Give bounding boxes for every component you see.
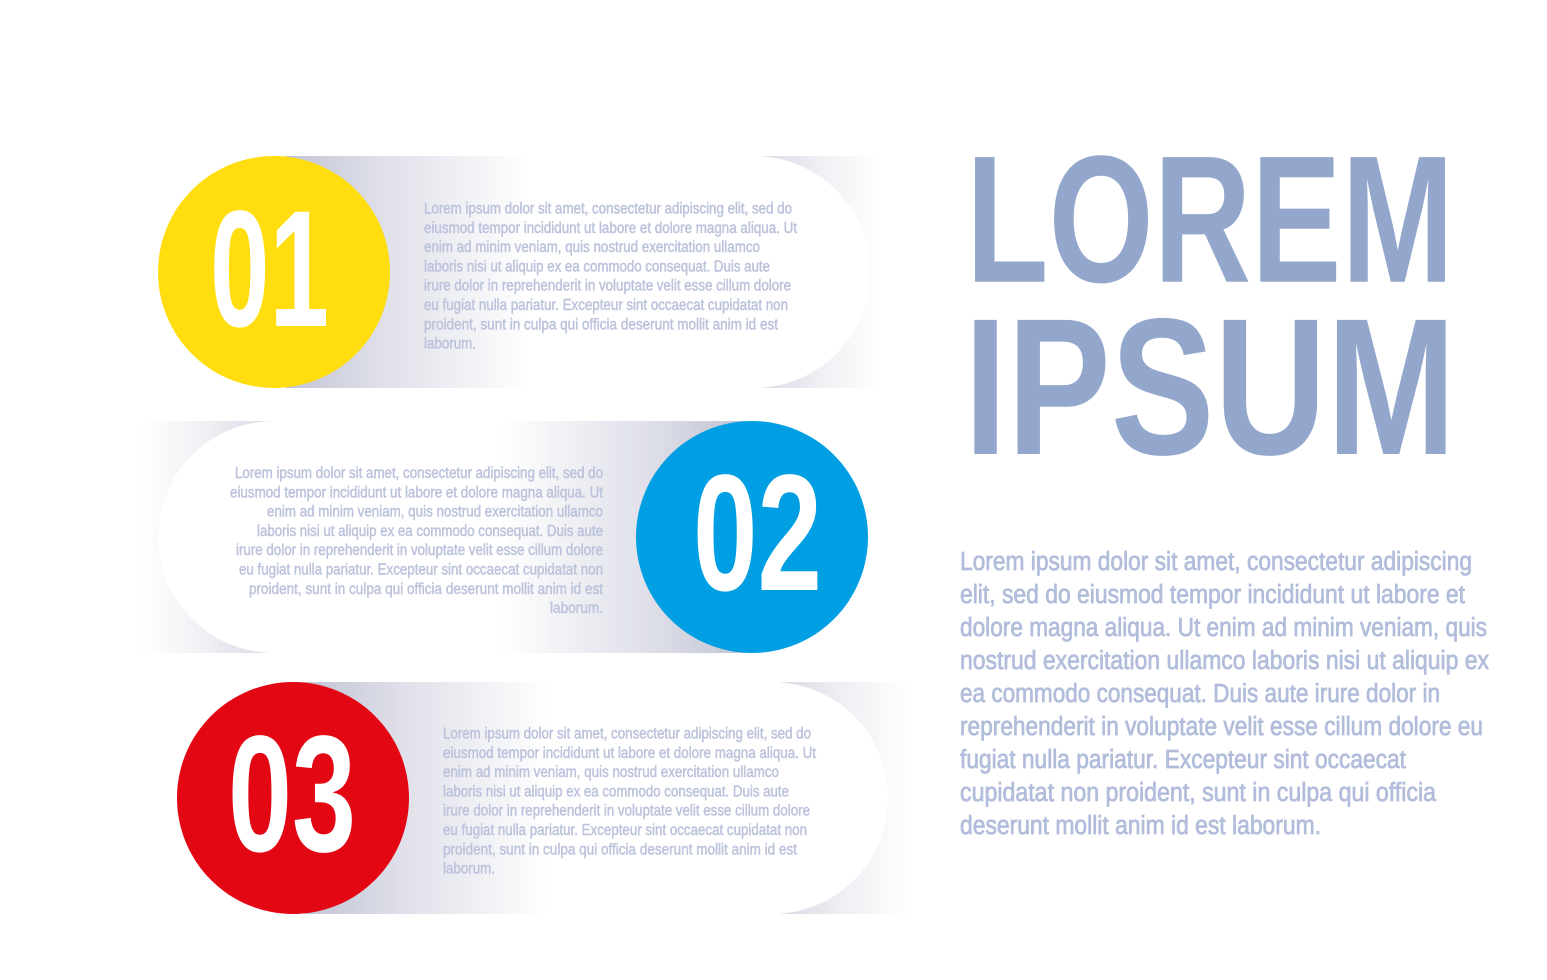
text block: step 02: proident, sunt in culpa qui officia deserunt mollit anim id est bbox=[249, 581, 604, 598]
number 03: 03 bbox=[228, 702, 356, 887]
text block: step 01: eu fugiat nulla pariatur. Excepteur sint occaecat cupidatat non bbox=[424, 297, 788, 314]
text block: step 01: laborum. bbox=[424, 336, 476, 353]
text block: main description: Lorem ipsum dolor sit amet, consectetur adipiscing bbox=[960, 548, 1472, 576]
text block: step 03: proident, sunt in culpa qui officia deserunt mollit anim id est bbox=[443, 841, 798, 858]
text block: step 02: laboris nisi ut aliquip ex ea commodo consequat. Duis aute bbox=[257, 523, 603, 540]
text block: step 01: enim ad minim veniam, quis nostrud exercitation ullamco bbox=[424, 239, 760, 256]
panel: step 03 bbox=[177, 682, 911, 914]
icon: red circle 03 bbox=[177, 682, 409, 914]
panel: step 01 bbox=[158, 156, 882, 388]
text block: main description: cupidatat non proident, sunt in culpa qui officia bbox=[960, 779, 1437, 807]
text block: main description: fugiat nulla pariatur. Excepteur sint occaecat bbox=[960, 746, 1406, 774]
title bbox=[964, 119, 1456, 496]
band shadow: step 02 bbox=[140, 421, 745, 653]
text block: step 02: irure dolor in reprehenderit in voluptate velit esse cillum dolore bbox=[236, 542, 603, 559]
text block: step 02: eu fugiat nulla pariatur. Excepteur sint occaecat cupidatat non bbox=[239, 562, 603, 578]
text block: step 03: laboris nisi ut aliquip ex ea commodo consequat. Duis aute bbox=[443, 783, 789, 800]
text block: step 01: eiusmod tempor incididunt ut labore et dolore magna aliqua. Ut bbox=[424, 220, 798, 237]
text block: step 01: proident, sunt in culpa qui officia deserunt mollit anim id est bbox=[424, 316, 779, 333]
text block: step 02: Lorem ipsum dolor sit amet, consectetur adipiscing elit, sed do bbox=[235, 465, 603, 482]
text block: main description: dolore magna aliqua. Ut enim ad minim veniam, quis bbox=[960, 614, 1487, 642]
text block: step 03: eiusmod tempor incididunt ut labore et dolore magna aliqua. Ut bbox=[443, 745, 817, 762]
text block: step 03: irure dolor in reprehenderit in voluptate velit esse cillum dolore bbox=[443, 803, 810, 820]
text block: step 03: enim ad minim veniam, quis nostrud exercitation ullamco bbox=[443, 764, 779, 781]
text block: step 01: Lorem ipsum dolor sit amet, consectetur adipiscing elit, sed do bbox=[424, 200, 792, 218]
text block: main description: elit, sed do eiusmod tempor incididunt ut labore et bbox=[960, 581, 1465, 609]
number 01: 01 bbox=[210, 177, 329, 362]
text block: step 03: Lorem ipsum dolor sit amet, consectetur adipiscing elit, sed do bbox=[443, 726, 811, 742]
icon: yellow circle 01 bbox=[158, 156, 390, 388]
band shadow: step 01 bbox=[285, 156, 882, 388]
text block: main description: deserunt mollit anim id est laborum. bbox=[960, 812, 1321, 840]
text block: step 02: laborum. bbox=[550, 600, 603, 617]
band shadow: step 03 bbox=[304, 682, 911, 914]
text block: step 02: eiusmod tempor incididunt ut labore et dolore magna aliqua. Ut bbox=[230, 484, 604, 501]
text block: step 02: enim ad minim veniam, quis nostrud exercitation ullamco bbox=[267, 504, 603, 521]
number 02: 02 bbox=[693, 441, 822, 626]
text block: main description: reprehenderit in voluptate velit esse cillum dolore eu bbox=[960, 713, 1483, 741]
icon: blue circle 02 bbox=[636, 421, 868, 653]
text block: step 01: laboris nisi ut aliquip ex ea commodo consequat. Duis aute bbox=[424, 258, 770, 275]
text block: step 01: irure dolor in reprehenderit in voluptate velit esse cillum dolore bbox=[424, 278, 791, 295]
text block: main description: ea commodo consequat. Duis aute irure dolor in bbox=[960, 680, 1440, 708]
text block: main description: nostrud exercitation ullamco laboris nisi ut aliquip ex bbox=[960, 647, 1489, 675]
text block: step 03: laborum. bbox=[443, 861, 495, 878]
panel: step 02 bbox=[140, 421, 868, 653]
text block: step 03: eu fugiat nulla pariatur. Excepteur sint occaecat cupidatat non bbox=[443, 822, 807, 839]
